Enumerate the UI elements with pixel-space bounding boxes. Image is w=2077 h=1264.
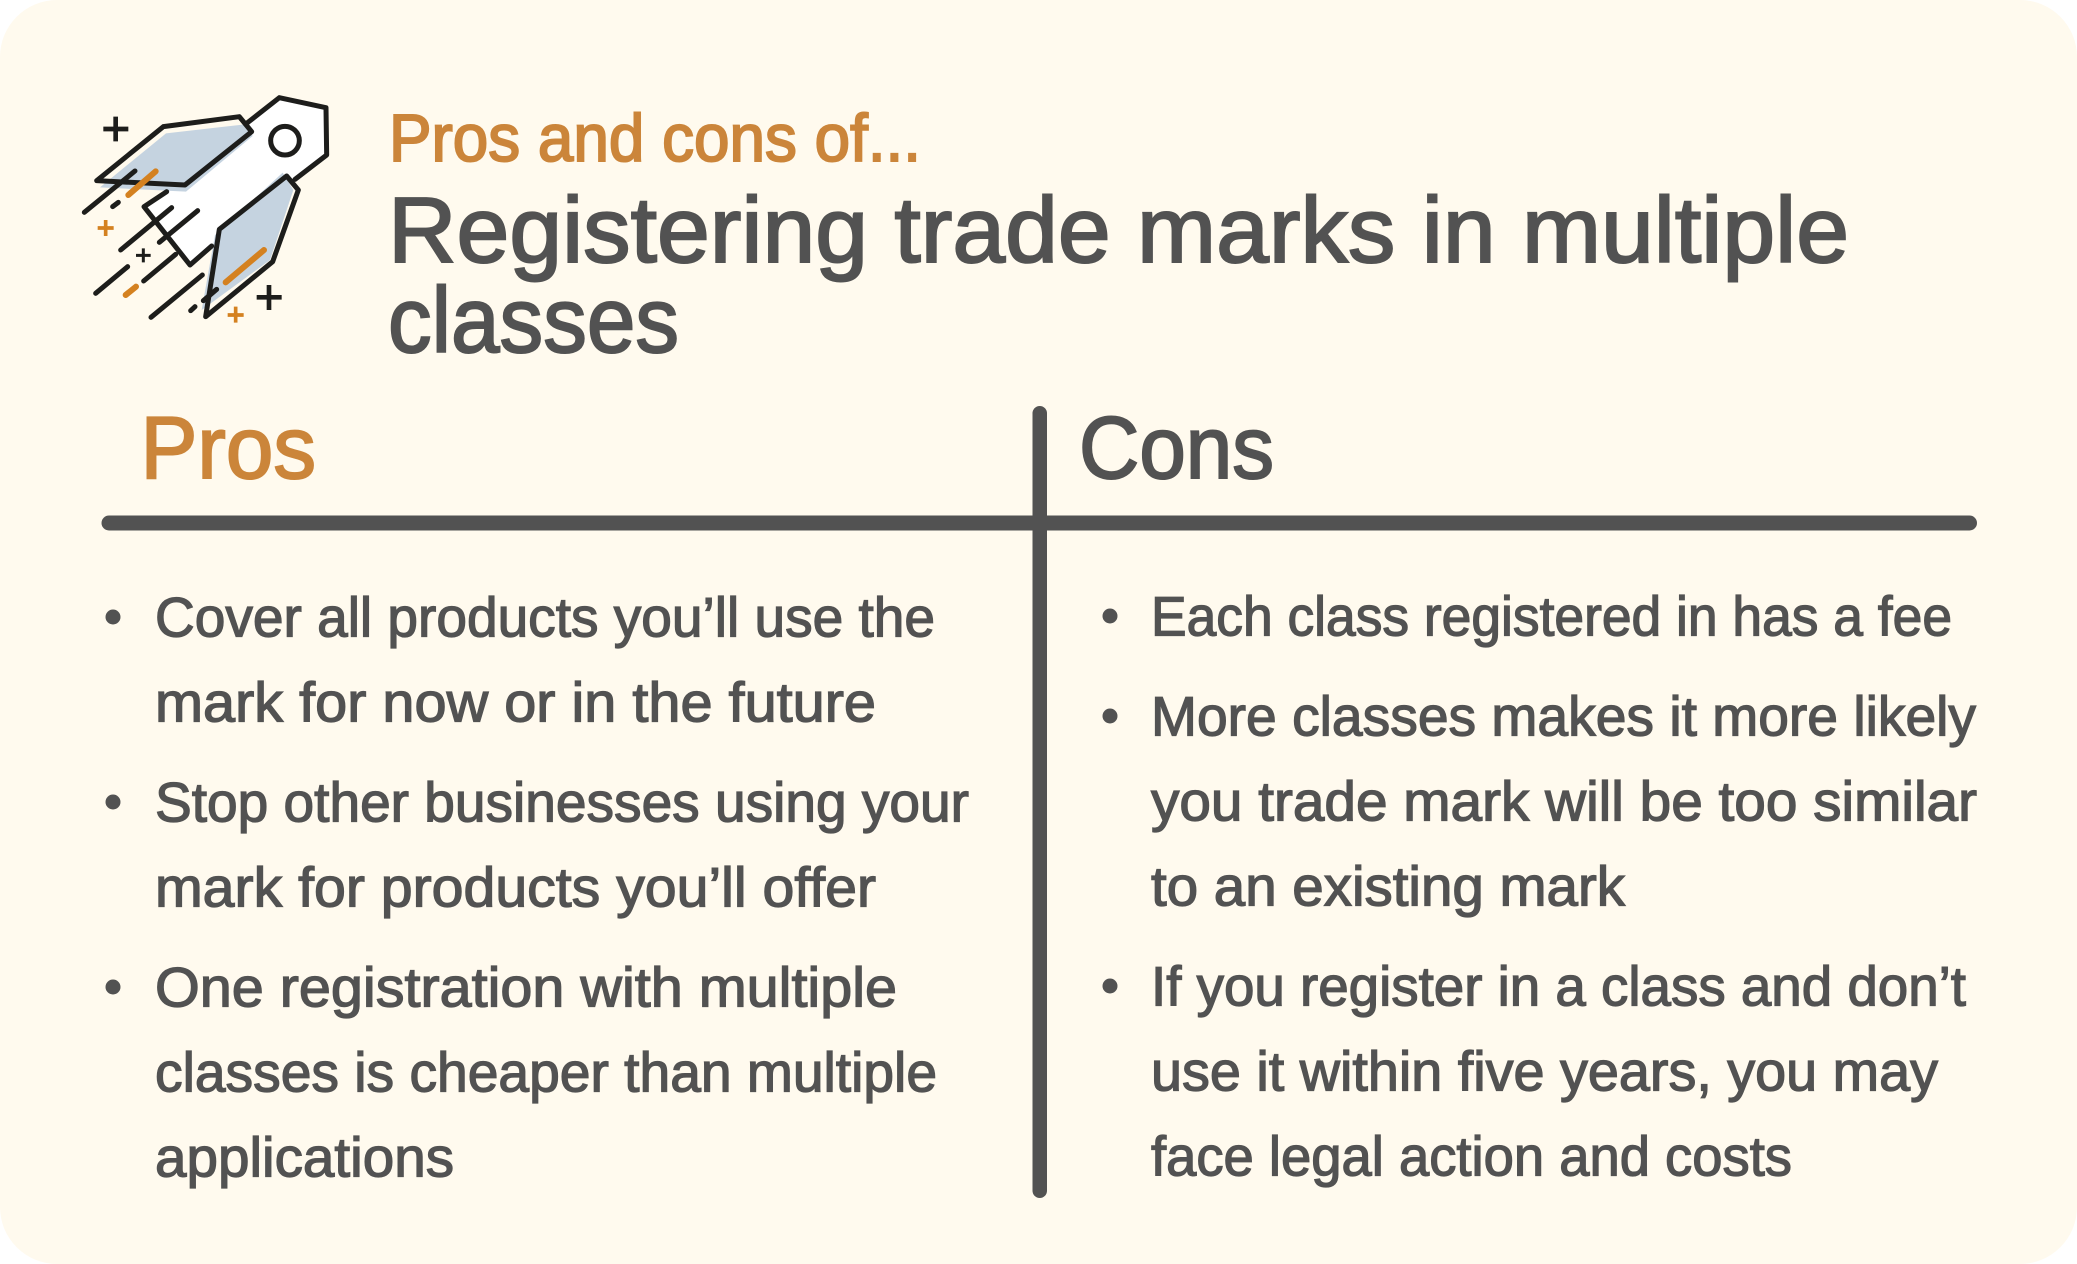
horizontal divider xyxy=(102,516,1977,530)
bullet: pro 3: classes is cheaper than multiple xyxy=(155,1040,937,1104)
bullet: con 1: Each class registered in has a fee xyxy=(1151,584,1952,648)
bullet: pro 1: Cover all products you’ll use the xyxy=(155,586,935,648)
bullet: con 2: you trade mark will be too similar xyxy=(1151,770,1977,832)
bullet: pro 3: applications xyxy=(155,1126,454,1188)
bullet: pro 2 xyxy=(106,770,969,918)
bullet: pro 2: mark for products you’ll offer xyxy=(155,856,876,918)
main title: Registering trade marks in multiple xyxy=(388,178,1849,282)
heading: cons: Cons xyxy=(1079,398,1274,497)
bullet: con 3: face legal action and costs xyxy=(1151,1124,1792,1188)
main title xyxy=(388,178,1849,372)
bullet: con 3: use it within five years, you may xyxy=(1151,1040,1938,1102)
bullet: pro 1 xyxy=(106,586,935,734)
main title: classes xyxy=(388,268,679,372)
icon: rocket xyxy=(84,98,327,323)
bullet: pro 2: Stop other businesses using your xyxy=(155,770,969,834)
eyebrow heading: Pros and cons of... xyxy=(389,101,921,176)
bullet: pro 3 xyxy=(106,956,937,1188)
list: pros xyxy=(106,586,969,1188)
bullet: con 3 xyxy=(1102,954,1966,1188)
bullet: con 2: to an existing mark xyxy=(1151,854,1626,918)
list: cons xyxy=(1102,584,1977,1188)
bullet: pro 3: One registration with multiple xyxy=(155,956,897,1018)
vertical divider xyxy=(1032,406,1047,1198)
bullet: con 3: If you register in a class and don’t xyxy=(1151,954,1966,1018)
bullet: con 2: More classes makes it more likely xyxy=(1151,684,1976,748)
bullet: con 2 xyxy=(1102,684,1977,918)
heading: pros: Pros xyxy=(140,398,316,497)
bullet: pro 1: mark for now or in the future xyxy=(155,670,876,734)
